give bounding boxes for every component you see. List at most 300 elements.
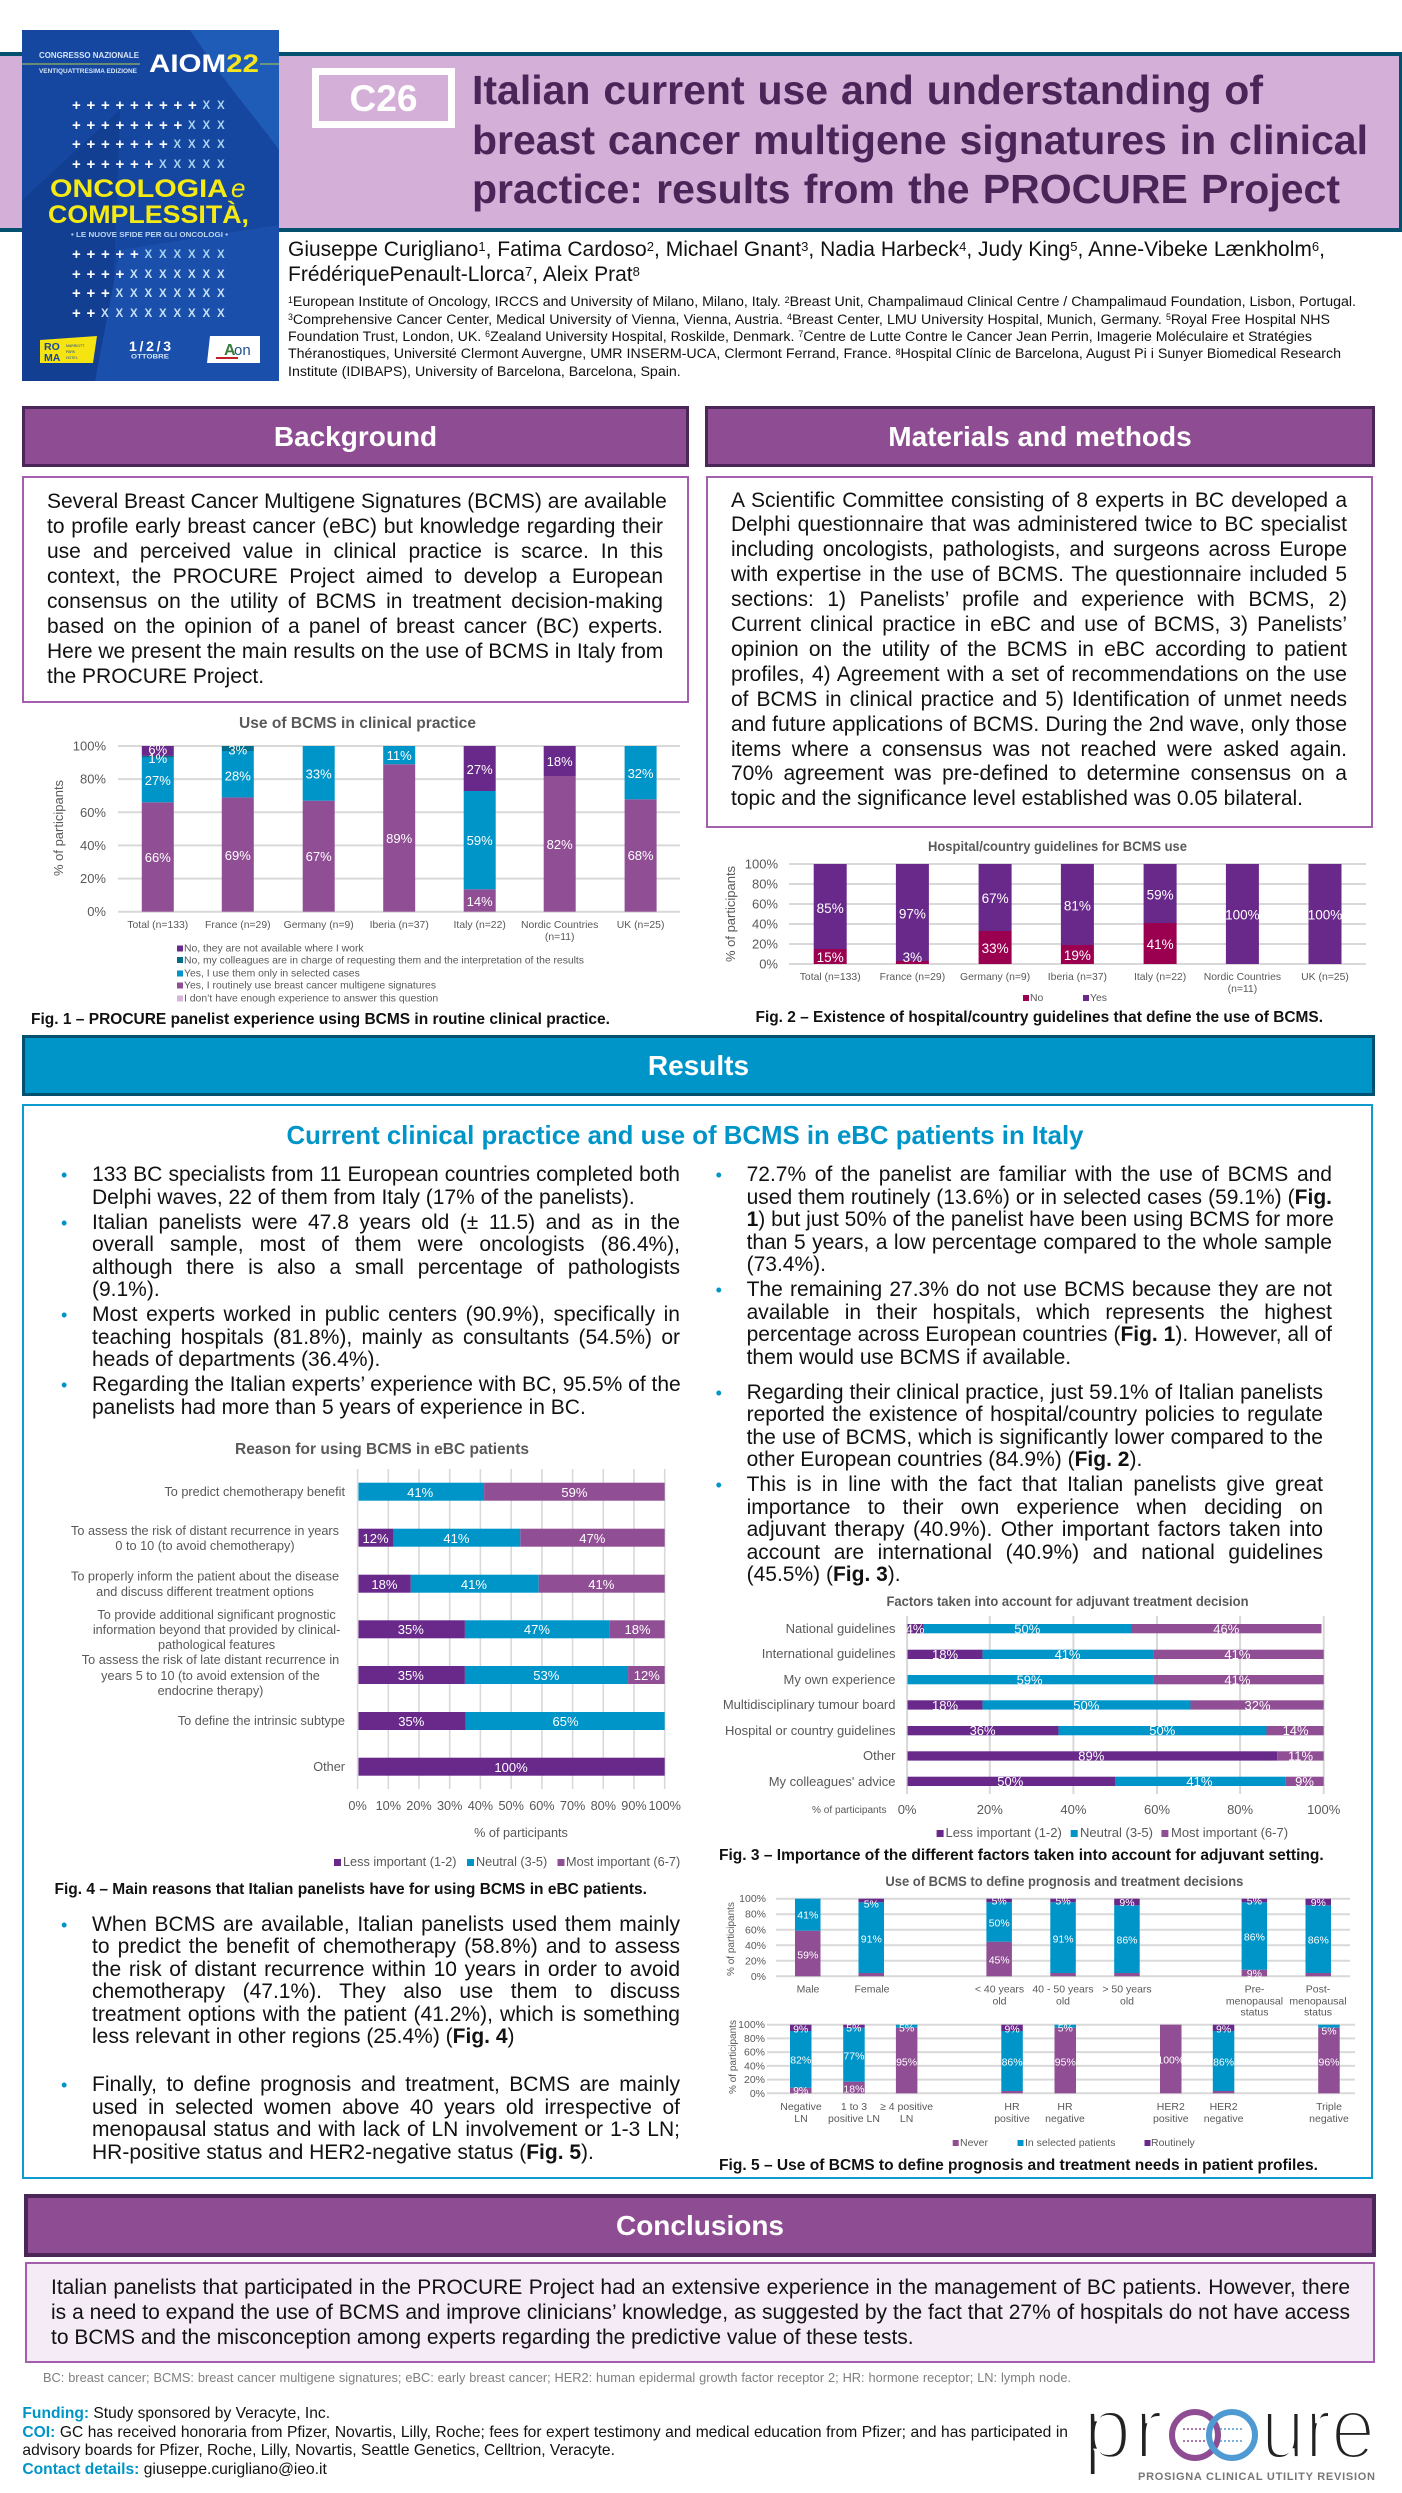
figure 2 caption: Fig. 2 – Existence of hospital/country guidelines that define the use of BCMS. [756,1009,1323,1026]
bar value labels: 100% [494,1760,528,1775]
category labels: Multidisciplinary tumour board [723,1697,896,1712]
x axis ticks: 50% [498,1799,524,1813]
legend: Yes [1090,993,1107,1004]
panel: results [22,1104,1373,2179]
title: practice: results from the PROCURE Project [472,166,1340,212]
funding, conflicts of interest and contact: COI: GC has received honoraria from Pfizer, Novartis, Lilly, Roche; fees for expert testimony and medical education from Pfizer; and has participated in [22,2424,1068,2441]
results bullets: panel profile [61,1163,681,1419]
top panel x labels: Pre- [1245,1984,1265,1996]
bottom panel value labels: 82% [790,2054,811,2066]
y axis ticks and gridlines: 80% [752,876,778,892]
bar value labels: 32% [1244,1698,1271,1713]
stacked bars [908,1624,1324,1786]
bar value labels: 47% [524,1622,550,1637]
conclusions paragraph [51,2276,1350,2349]
top panel x labels: < 40 years [975,1984,1024,1996]
background paragraph: Here we present the main results on the use of BCMS in Italy from [47,640,663,662]
category labels: National guidelines [786,1621,896,1636]
results bullets: panel profile: overall sample, most of them were oncologists (86.4%), [92,1233,680,1256]
results bullets: clinical practice: importance to their own experience when deciding on [747,1496,1323,1518]
results bullets: prognosis and treatment: HR-positive status and HER2-negative status (Fig. 5). [92,2140,594,2164]
x axis title: % of participants [474,1826,568,1840]
results heading: Current clinical practice and use of BCMS in eBC patients in Italy [286,1122,1084,1150]
chart title: Reason for using BCMS in eBC patients [235,1441,529,1458]
conclusions paragraph: to BCMS and the misconception among experts regarding the predictive value of these tests. [51,2326,914,2349]
methods paragraph: Current clinical practice in eBC and use of BCMS, 3) Panelists’ [731,613,1347,636]
venue badge: HOTEL [66,356,78,360]
methods paragraph: 70% agreement was pre-defined to determine consensus on a [731,762,1347,785]
bottom panel bars [790,2025,1340,2093]
results bullets: clinical practice: (45.5%) (Fig. 3). [747,1563,901,1586]
panel: background text [22,476,689,703]
bar value labels: 66% [145,850,171,865]
top panel x labels: menopausal [1289,1996,1347,2008]
top panel axes: 20% [745,1955,766,1967]
top panel value labels: 86% [1308,1934,1329,1946]
top panel x labels: status [1304,2007,1332,2019]
results bullets: clinical practice: reported the existence of hospital/country policies to regulate [747,1403,1323,1426]
congress name: VENTIQUATTRESIMA EDIZIONE [39,68,138,75]
y axis ticks and gridlines: 60% [80,805,106,820]
section header: Conclusions: Conclusions [616,2210,784,2241]
top panel axes [726,1893,1350,1983]
background paragraph: context, the PROCURE Project aimed to develop a European [47,564,663,588]
bar value labels: 41% [461,1577,487,1592]
results bullets: panel profile: 133 BC specialists from 11 European countries completed both [92,1163,680,1186]
text: • [61,2075,67,2095]
bottom panel value labels: 86% [1002,2057,1023,2069]
legend: Less important (1-2) [343,1855,457,1869]
top panel x labels: old [1120,1996,1134,2008]
results bullets: prognosis and treatment [61,2073,680,2164]
cover headline [48,173,249,229]
x axis ticks: 100% [648,1799,681,1813]
affiliations: Théranostiques, Université Clermont Auvergne, UMR INSERM-UCA, Clermont Ferrand, France. 8Hospital Clínic de Barcelona, August Pi i Sunyer Biomedical Research [288,346,1341,362]
results bullets: familiarity with BCMS: (73.4%). [747,1253,826,1276]
legend: Most important (6-7) [566,1855,680,1869]
logo tagline: PROSIGNA CLINICAL UTILITY REVISION [1138,2471,1375,2483]
results bullets: clinical practice [716,1380,1323,1586]
y axis title: % of participants [51,779,66,876]
y axis ticks and gridlines: 100% [745,856,778,872]
results bullets: panel profile: (9.1%). [92,1278,160,1301]
section header: Results [22,1035,1375,1096]
PROCURE logo [1083,2380,1375,2483]
x axis labels: Total (n=133) [800,972,861,983]
bar value labels: 82% [547,837,573,852]
top panel value labels: 50% [989,1918,1010,1930]
x axis ticks: 10% [376,1799,401,1813]
venue badge [40,336,97,364]
funding, conflicts of interest and contact: advisory boards for Pfizer, Roche, Lilly, Novartis, Seattle Genetics, Celltrion, Veracyte. [22,2442,615,2459]
category labels: 0 to 10 (to avoid chemotherapy) [115,1539,295,1553]
vertical gridlines [907,1616,1324,1794]
society logo: on [234,342,251,359]
bar value labels: 85% [817,901,844,916]
bottom panel value labels: 95% [1055,2057,1076,2069]
methods paragraph: A Scientific Committee consisting of 8 experts in BC developed a [731,488,1347,512]
results bullets: panel profile: Most experts worked in public centers (90.9%), specifically in [92,1303,680,1326]
title [472,67,1368,212]
venue badge: RO [44,341,60,353]
section header: Conclusions [24,2194,1376,2257]
y axis ticks and gridlines: 0% [759,956,778,972]
top panel x labels: old [992,1996,1007,2008]
results bullets: familiarity with BCMS: 72.7% of the panelist are familiar with the use of BCMS and [747,1163,1332,1186]
x axis title: % of participants [812,1805,886,1816]
plus and cross rows, upper: +++++++ [72,136,168,153]
category labels: and discuss different treatment options [96,1585,314,1599]
background paragraph [47,490,667,688]
authors: FrédériquePenault-Llorca7, Aleix Prat8 [288,263,640,286]
bottom panel value labels: 86% [1213,2057,1234,2069]
bottom panel axes: % of participants [728,2020,739,2094]
figure 5: use of BCMS in patient profiles [719,1873,1355,2174]
background paragraph: Several Breast Cancer Multigene Signatures (BCMS) are available [47,490,667,512]
bar value labels: 100% [1308,908,1342,922]
section header: Background [22,406,689,467]
bar value labels: 6% [148,742,168,757]
x axis ticks: 40% [468,1799,493,1813]
bar value labels: 11% [1288,1748,1313,1764]
affiliations [288,294,1356,380]
results bullets: panel profile: heads of departments (36.4%). [92,1348,380,1371]
y axis title: % of participants [723,865,738,962]
bar value labels: 100% [1225,908,1260,922]
bar value labels: 18% [547,754,573,769]
top panel value labels: 9% [1311,1897,1326,1909]
top panel bars [795,1899,1331,1976]
cover headline: COMPLESSITÀ, [48,200,249,229]
results bullets: panel profile: Delphi waves, 22 of them from Italy (17% of the panelists). [92,1186,635,1209]
bar value labels: 41% [1224,1647,1251,1662]
methods paragraph: including oncologists, pathologists, and surgeons across Europe [731,538,1347,561]
bar value labels: 89% [386,831,413,846]
bar value labels: 35% [398,1714,425,1729]
bar value labels: 53% [533,1668,560,1683]
bottom panel value labels: 9% [793,2024,808,2036]
results bullets: familiarity with BCMS: than 5 years, a low percentage compared to the whole sample [747,1231,1332,1254]
x axis labels: UK (n=25) [617,920,664,931]
x axis ticks: 0% [348,1799,367,1813]
congress name: CONGRESSO NAZIONALE [39,50,139,60]
legend: Routinely [1151,2137,1196,2149]
text: • [716,1280,722,1300]
top panel x labels: Post- [1306,1984,1331,1996]
bottom panel x labels: negative [1309,2113,1349,2125]
top panel value labels: 9% [1119,1897,1135,1909]
bar value labels: 59% [1147,888,1174,902]
x axis ticks: 60% [1144,1802,1170,1817]
legend: Yes, I routinely use breast cancer multigene signatures [184,981,436,992]
dates: 1 / 2 / 3 [129,338,171,354]
category labels [723,1621,896,1789]
x axis ticks: 60% [529,1799,555,1813]
authors: Giuseppe Curigliano1, Fatima Cardoso2, Michael Gnant3, Nadia Harbeck4, Judy King5, Anne-Vibeke Lænkholm6, [288,238,1325,261]
bottom panel axes: 80% [744,2033,765,2045]
bar value labels: 33% [982,941,1009,956]
methods paragraph: items where a consensus was not reached were asked again. [731,738,1347,761]
panel: methods text [706,476,1373,828]
category labels: To assess the risk of late distant recurrence in [82,1653,339,1667]
plus and cross rows, upper: ++++++ [72,156,154,173]
bar value labels: 11% [387,748,412,763]
bar value labels: 3% [228,742,248,758]
affiliations: Foundation Trust, London, UK. 6Zealand University Hospital, Roskilde, Denmark. 7Centre de Lutte Contre le Cancer Jean Perrin, Imagerie Moléculaire et Stratégies [288,329,1312,345]
figure 2: hospital/country guidelines [723,838,1366,1026]
bottom panel x labels: Negative [780,2101,822,2113]
category labels: information beyond that provided by clinical- [93,1623,340,1637]
bottom panel value labels: 77% [843,2051,864,2063]
bar value labels: 41% [1186,1774,1213,1789]
bar value labels: 41% [1224,1672,1251,1688]
top panel axes: 100% [739,1893,766,1905]
top panel value labels: 5% [864,1899,879,1911]
results bullets: panel profile: Regarding the Italian experts’ experience with BC, 95.5% of the [92,1373,681,1396]
plus and cross rows, lower: XXXXXXXXX [101,308,225,320]
venue badge: MA [44,352,61,364]
bar value labels: 46% [1213,1622,1240,1636]
top panel value labels: 5% [1056,1896,1071,1908]
bar value labels: 9% [1295,1774,1314,1789]
title band [0,52,1402,232]
category labels: My colleagues' advice [769,1774,896,1789]
bar value labels: 67% [982,891,1009,906]
legend: No, they are not available where I work [184,944,364,955]
top panel x labels: menopausal [1226,1996,1283,2008]
bar value labels: 41% [443,1531,470,1546]
x axis labels: France (n=29) [205,920,271,931]
section header: Results: Results [648,1050,749,1081]
bottom panel value labels: 100% [1157,2054,1184,2066]
section header: Materials and methods [705,406,1375,467]
bar value labels: 47% [579,1531,606,1546]
stacked bars [814,864,1342,964]
x axis labels: Iberia (n=37) [370,920,429,931]
category labels: To properly inform the patient about the disease [71,1570,339,1584]
bar value labels: 59% [1017,1672,1043,1688]
results bullets: clinical practice: account are international (40.9%) and national guidelines [747,1540,1323,1564]
top panel value labels: 91% [861,1934,882,1946]
legend: Never [960,2137,989,2149]
bar value labels: 50% [1073,1698,1100,1713]
plus and cross rows, lower: XXXXXXXX [116,288,225,300]
congress cover image [22,30,279,381]
legend [334,1855,680,1869]
top panel value labels: 9% [1247,1968,1262,1980]
x axis labels: UK (n=25) [1301,972,1349,983]
bottom panel x labels: HER2 [1157,2101,1185,2113]
top panel value labels: 86% [1244,1932,1265,1944]
results bullets: familiarity with BCMS: 1) but just 50% of the panelist have been using BCMS for more [747,1208,1334,1231]
affiliations: 1European Institute of Oncology, IRCCS and University of Milano, Milano, Italy. 2Breast Unit, Champalimaud Clinical Centre / Champalimaud Foundation, Lisbon, Portugal. [288,294,1356,310]
figure 4: reasons for using BCMS [54,1441,681,1898]
category labels: My own experience [784,1672,896,1687]
top panel axes: 40% [745,1940,766,1952]
bar value labels: 35% [398,1622,424,1637]
plus and cross rows, lower: ++++ [72,266,124,283]
legend: Neutral (3-5) [1080,1825,1153,1840]
category labels: To predict chemotherapy benefit [164,1485,345,1499]
bar value labels: 68% [628,848,654,863]
bar value labels: 35% [398,1668,424,1683]
plus and cross rows, upper: XXX [188,120,225,132]
y axis ticks and gridlines: 20% [80,871,106,886]
bottom panel axes [728,2019,1355,2100]
legend: Most important (6-7) [1171,1825,1288,1840]
category labels: Other [863,1748,896,1763]
bar value labels: 32% [628,766,654,781]
bar value labels: 12% [634,1668,660,1683]
abbreviations: BC: breast cancer; BCMS: breast cancer multigene signatures; eBC: early breast cancer; HER2: human epidermal growth factor receptor 2; HR: hormone receptor; LN: lymph node. [43,2370,1071,2385]
figure 1 caption: Fig. 1 – PROCURE panelist experience using BCMS in routine clinical practice. [31,1011,610,1028]
methods paragraph: sections: 1) Panelists’ profile and experience with BCMS, 2) [731,588,1347,611]
x axis labels [800,972,1349,995]
figure 3 caption: Fig. 3 – Importance of the different factors taken into account for adjuvant setting. [719,1847,1324,1864]
bar value labels: 69% [225,848,251,863]
bar value labels: 18% [624,1622,651,1637]
results bullets: panel profile: teaching hospitals (81.8%), mainly as consultants (54.5%) or [92,1326,680,1349]
bar value labels: 12% [362,1531,389,1546]
plus and cross rows, upper: XXXXX [159,159,225,171]
methods paragraph: and future applications of BCMS. During the 2nd wave, only those [731,713,1347,736]
bottom panel x labels: Triple [1316,2101,1342,2113]
bottom panel x labels: HR [1057,2101,1073,2113]
logo wordmark right: ure [1261,2380,1375,2477]
chart title: Hospital/country guidelines for BCMS use [928,838,1187,854]
category labels: International guidelines [762,1646,896,1661]
bottom panel value labels: 5% [1058,2022,1073,2034]
x axis ticks: 40% [1060,1802,1087,1817]
plus and cross rows, lower: XXXXXX [144,249,225,261]
figure 4 caption: Fig. 4 – Main reasons that Italian panelists have for using BCMS in eBC patients. [54,1881,647,1898]
bottom panel value labels: 9% [1216,2024,1231,2036]
legend [177,944,584,1005]
authors [288,238,1325,286]
bar value labels: 1% [148,751,168,766]
results bullets: uses of BCMS: less relevant in other regions (25.4%) (Fig. 4) [92,2025,515,2048]
bottom panel x labels: LN [794,2113,808,2125]
results bullets: prognosis and treatment: menopausal status and with lack of LN involvement or 1-3 LN; [92,2118,680,2141]
x axis ticks: 20% [406,1799,432,1813]
bar value labels: 41% [407,1485,434,1500]
text: • [61,1914,67,1934]
bar value labels: 18% [932,1698,958,1713]
category labels: years 5 to 10 (to avoid extension of the [101,1669,320,1683]
results bullets: familiarity with BCMS: The remaining 27.3% do not use BCMS because they are not [747,1278,1332,1301]
stacked bars [358,1483,665,1776]
bar value labels: 50% [1149,1723,1176,1738]
bottom panel x labels: positive LN [828,2113,880,2125]
methods paragraph [731,488,1348,810]
top panel axes: % of participants [726,1902,737,1976]
category labels: To define the intrinsic subtype [178,1714,345,1728]
bottom panel x labels: negative [1204,2113,1244,2125]
results bullets: clinical practice: other European countries (84.9%) (Fig. 2). [747,1448,1142,1471]
results bullets: clinical practice: This is in line with the fact that Italian panelists give great [747,1473,1323,1496]
legend: Yes, I use them only in selected cases [184,969,360,980]
results bullets: familiarity with BCMS: available in their hospitals, which represents the highest [747,1301,1332,1324]
y axis ticks and gridlines [745,856,1366,972]
text: • [61,1213,67,1233]
bar value labels: 97% [899,906,926,922]
top panel value labels: 45% [989,1954,1010,1966]
section header: Materials and methods: Materials and methods [888,421,1192,452]
results bullets: clinical practice: Regarding their clinical practice, just 59.1% of Italian panelists [747,1380,1323,1404]
top panel value labels: 41% [797,1909,818,1921]
bar value labels: 89% [1078,1748,1105,1764]
chart title: Use of BCMS in clinical practice [239,715,476,732]
background paragraph: consensus on the utility of BCMS in treatment decision-making [47,590,663,612]
bar value labels: 65% [552,1714,579,1729]
bar value labels: 36% [970,1723,996,1738]
text: • [716,1165,722,1185]
bottom panel value labels: 5% [1321,2026,1337,2038]
bar value labels: 81% [1064,898,1091,914]
panel: conclusions [25,2262,1375,2363]
methods paragraph: profiles, 4) Agreement with a set of recommendations on the use [731,663,1347,686]
poster code badge C26 [312,68,455,128]
top panel x labels [797,1984,1347,2019]
poster code badge C26: C26 [350,78,417,119]
results bullets: uses of BCMS: the risk of distant recurrence within 10 years in order to avoid [92,1958,680,1980]
x axis ticks: 20% [977,1802,1003,1817]
bottom panel x labels: 1 to 3 [841,2101,867,2113]
bottom panel value labels: 9% [1005,2024,1020,2036]
bottom panel value labels: 9% [793,2085,808,2097]
top panel value labels: 5% [992,1896,1007,1908]
bottom panel axes: 60% [744,2047,765,2059]
bar value labels [145,742,654,909]
legend: Less important (1-2) [946,1825,1062,1840]
figure 5 caption: Fig. 5 – Use of BCMS to define prognosis and treatment needs in patient profiles. [719,2157,1318,2174]
x axis ticks: 80% [1227,1802,1254,1817]
plus and cross rows, upper: XX [202,100,225,112]
x axis labels: Italy (n=22) [1134,972,1186,983]
x axis labels: Nordic Countries [1204,972,1281,983]
bar value labels: 15% [817,950,844,965]
x axis labels [127,920,664,943]
dates: OTTOBRE [131,354,170,360]
results bullets: uses of BCMS: treatment options with the patient (41.2%), which is something [92,2002,680,2026]
x axis labels: Germany (n=9) [960,972,1030,983]
cover headline: e [231,173,245,203]
top panel x labels: Female [854,1984,890,1996]
plus and cross rows, lower: ++ [72,305,96,322]
text: • [61,1305,67,1325]
logo wordmark left: pr [1083,2380,1163,2477]
category labels [71,1485,346,1774]
top panel axes: 60% [745,1924,766,1936]
x axis labels: Italy (n=22) [454,920,506,931]
results bullets: prognosis and treatment: used in selected women above 40 years old irrespective of [92,2096,680,2118]
bottom panel x labels [780,2101,1349,2125]
legend: Neutral (3-5) [476,1855,547,1869]
top panel x labels: 40 - 50 years [1032,1984,1094,1996]
results bullets: familiarity with BCMS: percentage across European countries (Fig. 1). However, all of [747,1323,1332,1346]
category labels: pathological features [158,1638,275,1652]
plus and cross rows, upper: +++++++++ [72,97,197,114]
results bullets: panel profile: panelists had more than 5 years of experience in BC. [92,1396,586,1419]
x axis ticks: 90% [621,1799,647,1813]
category labels: endocrine therapy) [158,1684,263,1698]
background paragraph: use and perceived value in clinical practice is scarce. In this [47,540,663,562]
cover headline: ONCOLOGIA [50,175,228,203]
bottom panel value labels: 96% [1318,2057,1340,2069]
affiliations: Institute (IDIBAPS), University of Barcelona, Barcelona, Spain. [288,364,681,380]
bar value labels [906,1622,1314,1789]
category labels: To assess the risk of distant recurrence in years [71,1524,339,1538]
